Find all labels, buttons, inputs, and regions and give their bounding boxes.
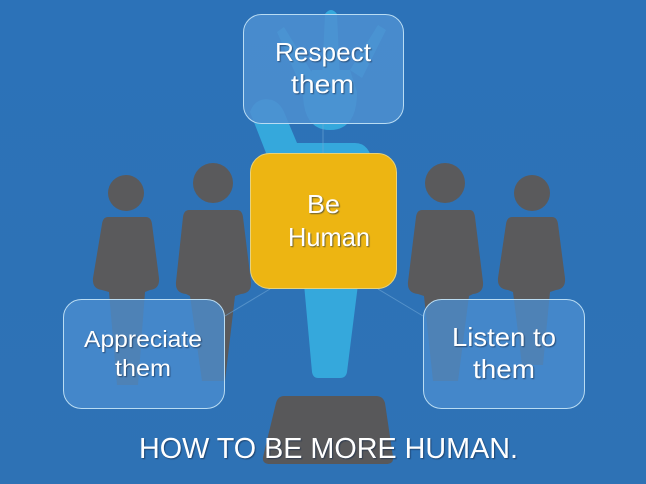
node: Listen to them: Listen to [452,322,556,352]
node: Listen to them: them [473,354,535,384]
node: Appreciate them [64,300,224,408]
pedestal [263,396,393,464]
node: Respect them: Respect [275,37,372,67]
node: Appreciate them: Appreciate [84,326,202,352]
figure: central person with raised hand [250,10,386,378]
node: Respect them: them [291,69,354,99]
figure: far left person [93,175,159,385]
node: Listen to them [424,300,584,408]
node: Be Human [250,154,396,288]
node: Respect them [244,14,404,124]
node: Be Human: Be [307,189,340,219]
node: Appreciate them: them [115,355,171,381]
connector lines [225,123,423,316]
figure: inner left person [176,163,251,381]
figure: inner right person [408,163,483,381]
node: Be Human: Human [288,222,370,252]
figure: far right person [498,175,565,365]
title: HOW TO BE MORE HUMAN. [139,433,518,465]
